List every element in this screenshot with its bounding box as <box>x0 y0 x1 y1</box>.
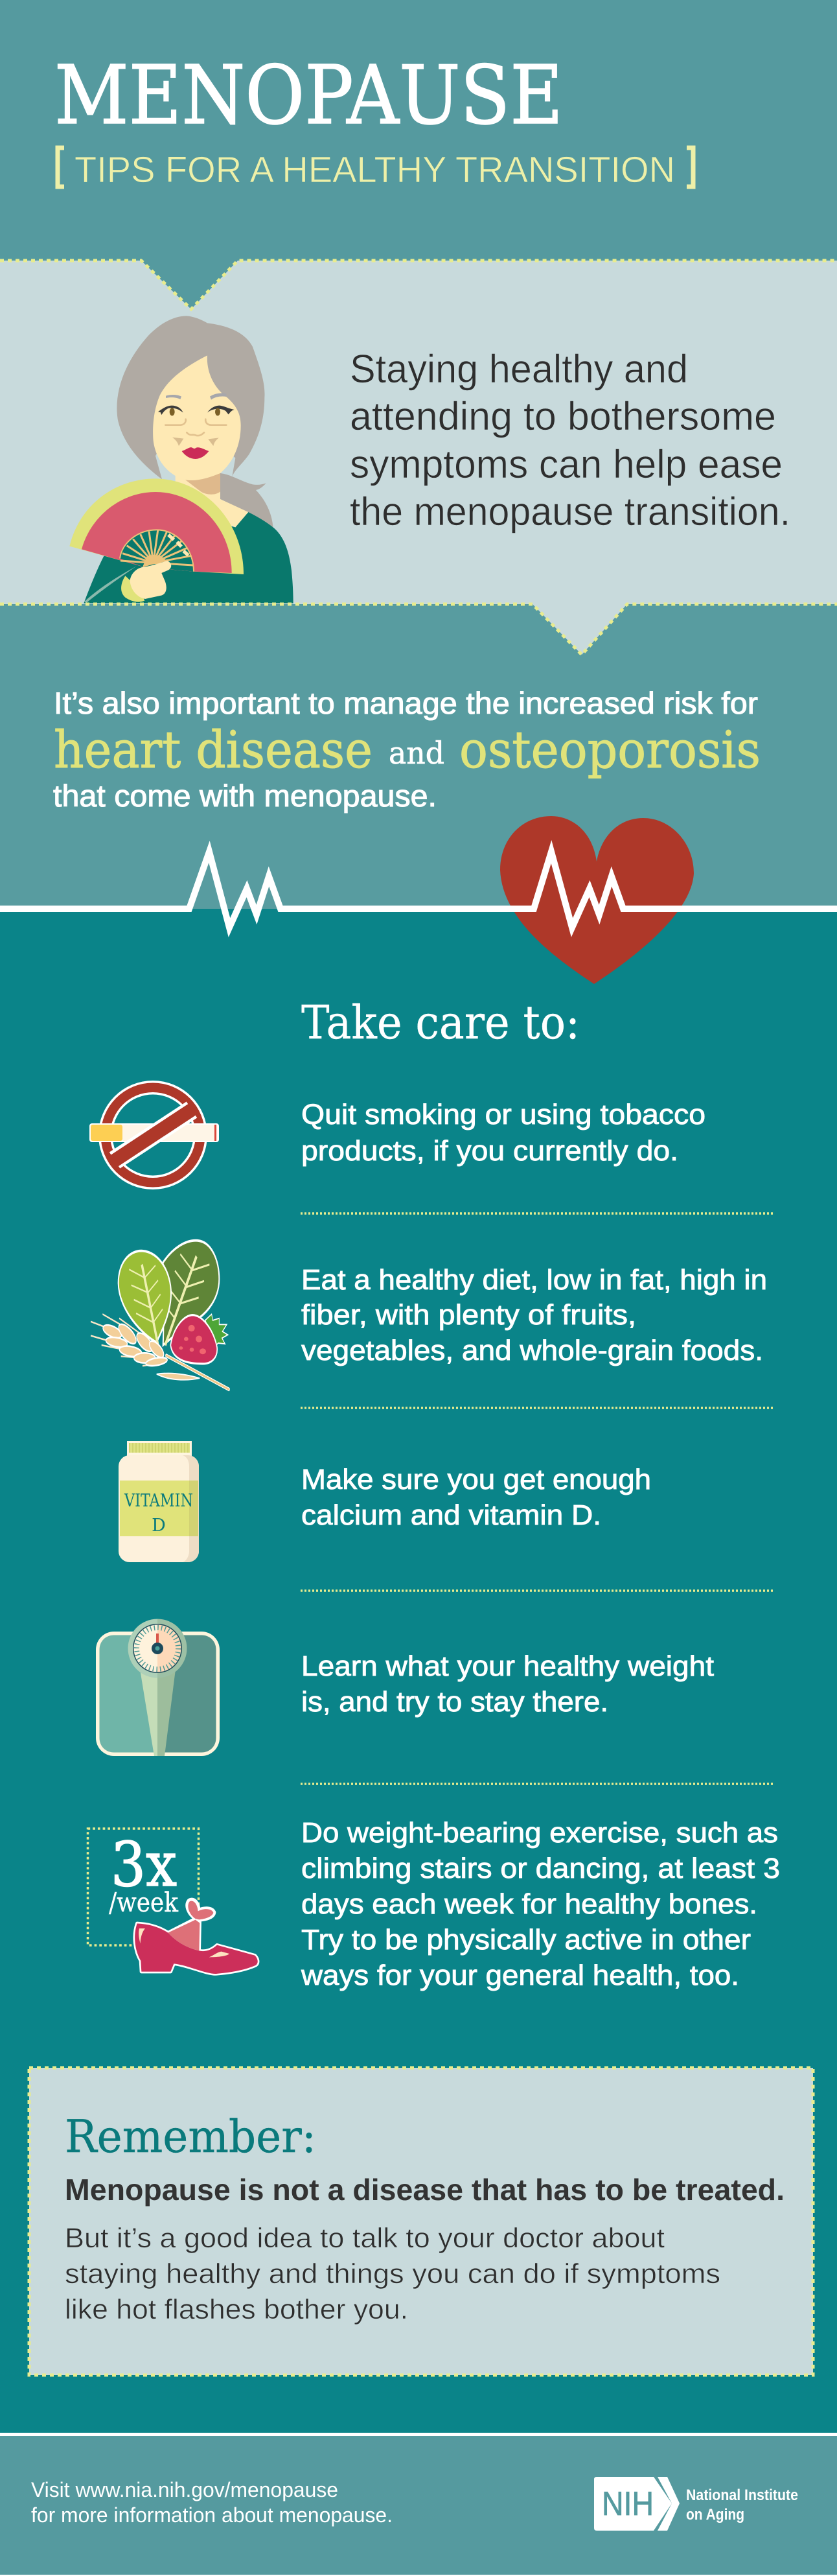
panel: remember <box>29 2068 813 2375</box>
panel: take care section background <box>0 909 837 2433</box>
intro text: symptoms can help ease <box>350 442 783 486</box>
tip: calcium and vitamin D <box>301 1464 651 1531</box>
title: MENOPAUSE <box>54 49 563 143</box>
neck <box>176 471 248 527</box>
tip: calcium and vitamin D: calcium and vitamin D. <box>301 1499 601 1531</box>
tip: healthy weight: Learn what your healthy weight <box>301 1650 714 1682</box>
fan <box>69 478 244 574</box>
illustration: woman holding a fan <box>69 316 293 603</box>
icon: no smoking <box>89 1081 219 1189</box>
supporting text <box>65 2223 720 2325</box>
panel: footer <box>0 2433 837 2576</box>
supporting text: like hot flashes bother you. <box>65 2294 408 2325</box>
lips <box>182 447 209 459</box>
tip: healthy diet: vegetables, and whole-grain foods. <box>301 1335 763 1366</box>
tip: weight-bearing exercise: Do weight-bearing exercise, such as <box>301 1817 778 1849</box>
heading: take care to: Take care to: <box>301 996 580 1049</box>
wrinkles and nose <box>165 419 226 436</box>
intro text: Staying healthy and <box>350 347 688 391</box>
icon: bathroom scale <box>96 1619 220 1756</box>
icon: three times a week with shoe <box>88 1829 258 1974</box>
icon: heart <box>500 816 694 984</box>
NIH logo: NIH <box>602 2485 654 2523</box>
icon: vitamin D bottle: D <box>152 1516 166 1536</box>
tip: healthy diet: Eat a healthy diet, low in fat, high in <box>301 1264 767 1296</box>
tip: healthy weight: is, and try to stay there. <box>301 1686 608 1718</box>
tip: quit smoking: products, if you currently do. <box>301 1135 678 1167</box>
sleeve highlight <box>84 566 137 603</box>
ponytail <box>220 473 273 528</box>
shoe <box>135 1899 258 1974</box>
panel: light intro panel <box>0 261 837 655</box>
tip: healthy diet <box>301 1264 767 1366</box>
label <box>120 1481 198 1536</box>
panel: header <box>0 0 837 309</box>
tip: weight-bearing exercise: climbing stairs or dancing, at least 3 <box>301 1853 780 1884</box>
highlighted heart disease: heart disease <box>54 720 373 780</box>
body <box>84 512 293 603</box>
cigarette <box>89 1123 219 1142</box>
cap <box>127 1441 192 1457</box>
tip: quit smoking <box>301 1099 705 1167</box>
intro text <box>350 347 790 533</box>
light leaf <box>119 1251 171 1345</box>
hair <box>117 316 265 479</box>
heartbeat line <box>0 852 837 928</box>
heading: remember: Remember: <box>65 2111 316 2163</box>
tip: weight-bearing exercise <box>301 1817 780 1991</box>
icon: three times a week with shoe: /week <box>109 1887 179 1918</box>
intro text: attending to bothersome <box>350 394 776 438</box>
eyebrows <box>166 395 181 399</box>
dotted section borders <box>0 261 837 655</box>
closing line: that come with menopause. <box>53 779 437 813</box>
tip: weight-bearing exercise: days each week for healthy bones. <box>301 1888 757 1920</box>
eyes <box>158 406 235 416</box>
tip: healthy diet: fiber, with plenty of fruits, <box>301 1299 636 1331</box>
key message: Menopause is not a disease that has to be treated. <box>65 2173 785 2207</box>
icon: vitamin D bottle <box>119 1441 199 1562</box>
icon: healthy food <box>91 1241 229 1389</box>
hand <box>130 561 171 599</box>
dark leaf <box>163 1241 219 1345</box>
footer link text: Visit www.nia.nih.gov/menopause <box>31 2478 338 2501</box>
intro text: the menopause transition. <box>350 489 790 533</box>
wheat <box>91 1314 229 1389</box>
face <box>153 355 241 480</box>
and: and <box>389 736 444 771</box>
highlighted osteoporosis: osteoporosis <box>459 720 761 780</box>
tip: quit smoking: Quit smoking or using tobacco <box>301 1099 705 1130</box>
NIH logo: on Aging <box>686 2506 744 2523</box>
cuff <box>121 576 144 602</box>
risk statement text: It’s also important to manage the increased risk for <box>54 686 758 720</box>
icon: three times a week with shoe: 3x <box>111 1829 177 1901</box>
footer link text <box>31 2478 393 2527</box>
supporting text: But it’s a good idea to talk to your doctor about <box>65 2223 665 2254</box>
subtitle: TIPS FOR A HEALTHY TRANSITION <box>75 149 675 191</box>
panel: background of risk section <box>0 604 837 909</box>
tip: weight-bearing exercise: Try to be physically active in other <box>301 1924 751 1956</box>
NIH logo: National Institute <box>686 2487 798 2504</box>
bottle body <box>119 1455 199 1562</box>
icon: vitamin D bottle: VITAMIN <box>124 1491 193 1511</box>
risk statement text <box>53 686 761 813</box>
supporting text: staying healthy and things you can do if symptoms <box>65 2258 720 2289</box>
footer link text: for more information about menopause. <box>31 2503 393 2527</box>
tip: calcium and vitamin D: Make sure you get enough <box>301 1464 651 1495</box>
strawberry calyx <box>205 1314 228 1345</box>
tip: healthy weight <box>301 1650 714 1718</box>
NIH logo <box>594 2477 798 2531</box>
strawberry <box>170 1315 217 1364</box>
tip: weight-bearing exercise: ways for your general health, too. <box>301 1960 739 1991</box>
dotted dividers <box>301 1213 774 1784</box>
